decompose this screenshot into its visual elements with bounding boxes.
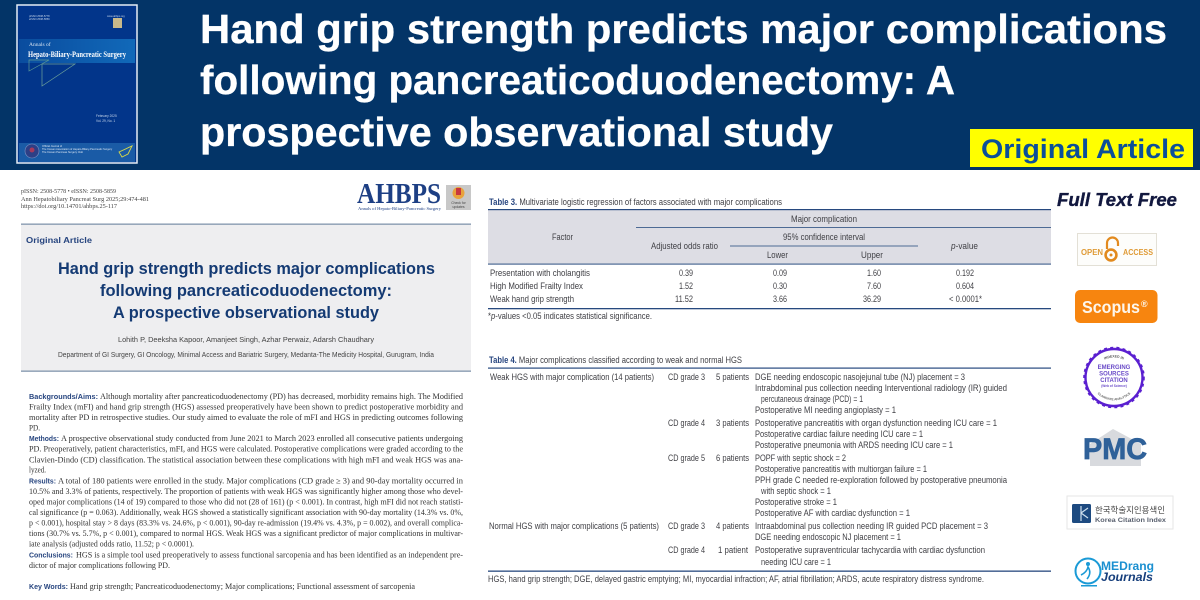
logo: PMC: PMC: [1083, 433, 1147, 466]
article title: following pancreaticoduodenectomy:: [100, 281, 392, 300]
abstract text: oped major complications (14 of 19) compared to those who did not (28 of 161) (p < 0.001). In contrast, high mFI did not reach statisti-: [29, 497, 463, 506]
table 3 header: Upper: [861, 250, 883, 260]
abstract text: Hand grip strength; Pancreaticoduodenectomy; Major complications; Functional assessment of sarcopenia: [70, 582, 415, 591]
normal HGS group: Intraabdominal pus collection needing IR guided PCD placement = 3: [755, 521, 988, 531]
abstract text: PD. Preoperatively, patient characteristics, mFI, and HGS were calculated. Postoperative complications were graded according to the: [29, 445, 463, 454]
table 3 caption: Table 3. Multivariate logistic regression of factors associated with major complications: [489, 197, 783, 207]
title panel: Department of GI Surgery, GI Oncology, Minimal Access and Bariatric Surgery, Medanta-The Medicity Hospital, Gurugram, India: [58, 352, 434, 359]
title panel: Lohith P, Deeksha Kapoor, Amanjeet Singh, Azhar Perwaiz, Adarsh Chaudhary: [118, 335, 374, 344]
panel: article first page: [21, 179, 471, 591]
weak HGS group: CD grade 4: [668, 418, 705, 428]
citation block: Ann Hepatobiliary Pancreat Surg 2025;29:474-481: [21, 196, 149, 203]
abstract text: iate analysis (adjusted odds ratio, 11.52; p < 0.0001).: [29, 540, 194, 549]
table 3 rows: 11.52: [675, 294, 693, 304]
citation block: pISSN: 2508-5778 • eISSN: 2508-5859: [21, 188, 116, 195]
citation block: https://doi.org/10.14701/ahbps.25-117: [21, 203, 118, 210]
citation block: [21, 188, 149, 210]
weak HGS group: PPH grade C needed re-exploration followed by postoperative pneumonia: [755, 475, 1007, 485]
logo: korea citation index: Korea Citation Index: [1095, 517, 1166, 524]
journal cover: eISSN 2508-5859: [29, 17, 50, 21]
table 3 rows: High Modified Frailty Index: [490, 281, 584, 291]
table 4 caption: Table 4. Major complications classified according to weak and normal HGS: [489, 355, 742, 365]
logo: emerging sources citation index: CLARIVATE ANALYTICS: [1098, 392, 1130, 400]
icon: check for updates: updates: [452, 205, 465, 209]
table 3 rows: 0.192: [956, 268, 974, 278]
normal HGS group: [489, 521, 988, 567]
logo: scopus: [1075, 290, 1158, 323]
normal HGS group: 4 patients: [716, 521, 750, 531]
table 3 footnote: *p-values <0.05 indicates statistical significance.: [488, 311, 652, 321]
abstract text: mortality after PD in retrospective studies. Our study aimed to evaluate the role of mFI and HGS in predicting outcomes following: [29, 413, 463, 422]
weak HGS group: Postoperative stroke = 1: [755, 497, 837, 507]
journal cover: pISSN 2508-5778: [29, 14, 50, 18]
weak HGS group: Postoperative pancreatitis with organ dysfunction needing ICU care = 1: [755, 418, 997, 428]
logo: emerging sources citation index: [1083, 346, 1145, 408]
normal HGS group: DGE needing endoscopic NJ placement = 1: [755, 532, 901, 542]
weak HGS group: 6 patients: [716, 453, 750, 463]
badge: original article: Original Article: [981, 134, 1185, 164]
weak HGS group: CD grade 3: [668, 372, 705, 382]
abstract text: A total of 180 patients were enrolled in the study. Major complications (CD grade ≥ 3) and 90-day mortality occurred in: [58, 476, 463, 485]
journal cover: The Korean Association of Hepato-Biliary-Pancreatic Surgery: [42, 147, 113, 151]
weak HGS group: Postoperative pancreatitis with multiorgan failure = 1: [755, 464, 927, 474]
table 3 rows: 1.60: [867, 268, 881, 278]
banner title: Hand grip strength predicts major complications: [200, 6, 1167, 52]
abstract text: Conclusions:: [29, 551, 73, 560]
title panel: Original Article: [26, 235, 92, 245]
abstract text: 10.5% and 3.3% of patients, respectively. The proportion of patients with weak HGS was significantly higher among those who devel-: [29, 487, 463, 496]
abstract text: Results:: [29, 476, 56, 485]
table 3 header: Lower: [767, 250, 788, 260]
journal cover: The Korean Pancreas Surgery Club: [42, 150, 84, 154]
icon: check for updates: Check for: [451, 201, 467, 205]
heading: full text free: Full Text Free: [1057, 190, 1177, 210]
logo: MEDrang journals: [1076, 558, 1154, 586]
panel: table 3: [488, 197, 1051, 321]
weak HGS group: Intrabdominal pus collection needing Interventional radiology (IR) guided: [755, 383, 1007, 393]
journal cover: Vol. 29, No. 1: [96, 119, 115, 123]
weak HGS group: POPF with septic shock = 2: [755, 453, 846, 463]
banner title: prospective observational study: [200, 109, 833, 155]
abstract text: Although mortality after pancreaticoduodenectomy (PD) has decreased, morbidity remains high. The Modified: [100, 392, 463, 401]
banner title: [200, 6, 1167, 155]
normal HGS group: CD grade 4: [668, 545, 705, 555]
logo: emerging sources citation index: (Web of Science): [1101, 384, 1127, 388]
weak HGS group: Postoperative pneumonia with ARDS needing ICU care = 1: [755, 440, 953, 450]
sidebar: indexing logos: [1057, 190, 1177, 586]
table 3 rows: < 0.0001*: [949, 294, 982, 304]
logo: open access: OPEN: [1081, 248, 1103, 257]
table 3 rows: 1.52: [679, 281, 693, 291]
logo: scopus: ®: [1141, 299, 1148, 309]
weak HGS group: DGE needing endoscopic nasojejunal tube (NJ) placement = 3: [755, 372, 965, 382]
abstract text: Frailty Index (mFI) and hand grip strength (HGS) assessed preoperatively have been shown to predict postoperative morbidity and: [29, 403, 463, 412]
table 3 rows: 3.66: [773, 294, 787, 304]
article title: A prospective observational study: [113, 303, 380, 322]
header banner: [0, 0, 1200, 170]
abstract text: Key Words:: [29, 582, 68, 591]
weak HGS group: with septic shock = 1: [760, 486, 831, 496]
logo: open access: [1078, 234, 1156, 266]
journal cover: Official Journal of: [42, 144, 62, 148]
abstract text: cal significance (p = 0.063). Additionally, weak HGS showed a statistically significant association with 90-day mortality (14.3% vs. 0%,: [29, 508, 463, 517]
title panel: [21, 224, 471, 372]
table 3 rows: 7.60: [867, 281, 881, 291]
journal cover: Annals of: [29, 41, 51, 48]
abstract text: A prospective observational study conducted from June 2021 to March 2023 enrolled all consecutive patients undergoing: [61, 434, 463, 443]
normal HGS group: 1 patient: [718, 545, 748, 555]
table 3 header: Adjusted odds ratio: [651, 241, 718, 251]
logo: emerging sources citation index: INDEXED IN: [1104, 355, 1124, 360]
abstract text: HGS is a simple tool used preoperatively to assess functional sarcopenia and has been identified as an independent pre-: [76, 551, 463, 560]
weak HGS group: Postoperative MI needing angioplasty = 1: [755, 405, 896, 415]
logo: MEDrang journals: MEDrang: [1101, 560, 1154, 573]
weak HGS group: 5 patients: [716, 372, 750, 382]
banner title: following pancreaticoduodenectomy: A: [200, 57, 955, 103]
table 3 rows: 0.30: [773, 281, 787, 291]
article title: [58, 259, 435, 322]
normal HGS group: CD grade 3: [668, 521, 705, 531]
logo: korea citation index: 한국학술지인용색인: [1095, 505, 1165, 515]
journal cover: February 2025: [96, 114, 117, 118]
weak HGS group: Weak HGS with major complication (14 patients): [490, 372, 654, 382]
table 3 header: Major complication: [791, 214, 857, 224]
normal HGS group: Postoperative supraventricular tachycardia with cardiac dysfunction: [755, 545, 985, 555]
table 3 header: Factor: [552, 232, 573, 242]
logo: AHBPS: Annals of Hepato-Biliary-Pancreatic Surgery: [358, 206, 442, 211]
table 3 rows: Weak hand grip strength: [490, 294, 574, 304]
abstract text: p < 0.001), hospital stay > 8 days (83.3% vs. 24.6%, p < 0.001), 90-day re-admission (19.4% vs. 4.3%, p = 0.002), and overall complica-: [29, 519, 463, 528]
abstract text: lyzed.: [29, 466, 46, 475]
article title: Hand grip strength predicts major complications: [58, 259, 435, 278]
logo: emerging sources citation index: CITATION: [1100, 378, 1128, 384]
table 3 header: 95% confidence interval: [783, 232, 865, 242]
table 3 header: [488, 209, 1051, 265]
abstract text: tions (30.7% vs. 5.7%, p < 0.001), compared to normal HGS. Weak HGS was a significant predictor of major complications in multivar-: [29, 529, 463, 538]
abstract text: Backgrounds/Aims:: [29, 392, 98, 401]
normal HGS group: needing ICU care = 1: [761, 557, 831, 567]
table 3 rows: 0.39: [679, 268, 693, 278]
logo: emerging sources citation index: EMERGING: [1098, 365, 1131, 371]
journal cover: [17, 5, 137, 163]
table 3 rows: Presentation with cholangitis: [490, 268, 591, 278]
abstract text: dictor of major complications following PD.: [29, 561, 170, 570]
journal cover: www.ahbps.org: [107, 14, 125, 18]
panel: table 4: [488, 355, 1051, 584]
logo: open access: ACCESS: [1123, 248, 1154, 257]
weak HGS group: Postoperative AF with cardiac dysfunction = 1: [755, 508, 910, 518]
weak HGS group: [490, 372, 1007, 518]
weak HGS group: Postoperative cardiac failure needing ICU care = 1: [755, 429, 923, 439]
table 3 rows: 36.29: [863, 294, 881, 304]
table 3 rows: [488, 268, 1051, 309]
abstract text: Methods:: [29, 434, 59, 443]
table 3 rows: 0.09: [773, 268, 787, 278]
logo: scopus: Scopus: [1082, 297, 1140, 317]
normal HGS group: Normal HGS with major complications (5 patients): [489, 521, 659, 531]
weak HGS group: 3 patients: [716, 418, 750, 428]
weak HGS group: CD grade 5: [668, 453, 705, 463]
logo: korea citation index: [1067, 496, 1173, 529]
abstract text: Clavien-Dindo (CD) classification. The statistical association between these complications with high mFI and weak HGS was ana-: [29, 455, 463, 464]
table 3 rows: 0.604: [956, 281, 974, 291]
logo: AHBPS: AHBPS: [357, 179, 441, 210]
badge: original article: [970, 129, 1193, 167]
icon: check for updates: [446, 185, 471, 210]
table 3 header: p-value: [950, 241, 978, 251]
abstract text: PD.: [29, 424, 40, 433]
logo: MEDrang journals: Journals: [1101, 571, 1154, 584]
journal cover: Hepato-Biliary-Pancreatic Surgery: [28, 50, 126, 59]
abstract text: [29, 392, 463, 591]
weak HGS group: percutaneous drainage (PCD) = 1: [761, 394, 863, 404]
table 4 footnote: HGS, hand grip strength; DGE, delayed gastric emptying; MI, myocardial infraction; AF, atrial fibrillation; ARDS, acute respiratory distress syndrome.: [488, 574, 984, 584]
logo: emerging sources citation index: SOURCES: [1099, 372, 1129, 378]
